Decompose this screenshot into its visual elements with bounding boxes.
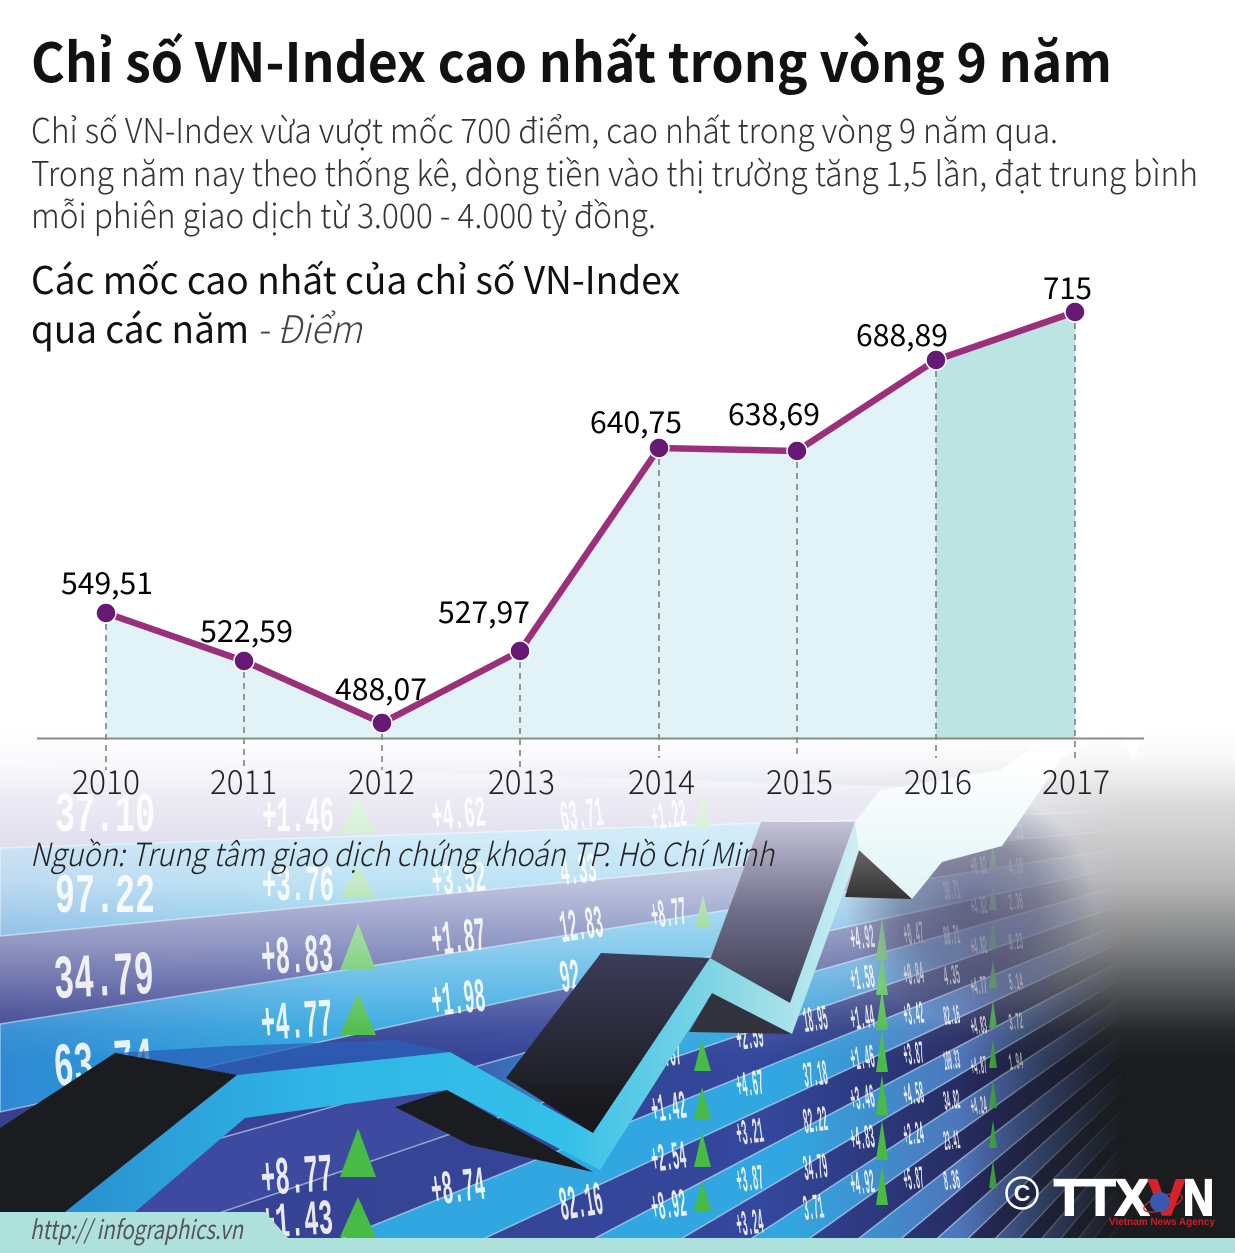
ticker numbers: +3.87 bbox=[734, 1159, 766, 1203]
value labels bbox=[61, 264, 1092, 709]
ticker numbers: 34.79 bbox=[52, 941, 156, 1017]
logo: TTXVN: V bbox=[1148, 1169, 1185, 1226]
ticker numbers: +4.92 bbox=[848, 1165, 877, 1206]
background photo: stock board with dark fade: 6.21 bbox=[1007, 819, 1025, 848]
logo: TTXVN: N bbox=[1183, 1169, 1214, 1226]
ticker numbers: +1.42 bbox=[649, 1085, 689, 1135]
logo: TTXVN: Vietnam News Agency bbox=[1109, 1216, 1215, 1228]
intro text block: mỗi phiên giao dịch từ 3.000 - 4.000 tỷ đồng. bbox=[31, 189, 656, 238]
ticker numbers: +1.58 bbox=[848, 960, 877, 1001]
ticker numbers: 82.16 bbox=[556, 1175, 607, 1235]
ticker numbers: 63.74 bbox=[51, 1027, 156, 1105]
footer strip with url: http:// infographics.vn bbox=[30, 1210, 244, 1247]
ticker numbers: +2.59 bbox=[734, 1017, 766, 1061]
year labels: 2017 bbox=[1042, 756, 1110, 804]
ticker numbers: +4.83 bbox=[969, 1011, 989, 1043]
background photo: stock board with dark fade bbox=[0, 730, 1235, 1253]
ticker numbers: +3.24 bbox=[734, 1203, 766, 1247]
ticker numbers: 34.82 bbox=[942, 1086, 962, 1119]
ticker numbers: 63.71 bbox=[558, 790, 606, 843]
ticker numbers: 3.71 bbox=[801, 1188, 826, 1231]
background photo: stock board with dark fade: 4.18 bbox=[1007, 854, 1025, 883]
copyright symbol bbox=[1006, 1178, 1038, 1208]
ticker numbers: +4.77 bbox=[969, 971, 989, 1003]
ticker numbers: +2.54 bbox=[649, 1135, 689, 1185]
ticker numbers: +1.87 bbox=[429, 911, 488, 970]
arrows: dark and cyan ribbons bbox=[0, 640, 1165, 1212]
line chart: VN-Index highs by year bbox=[37, 264, 1144, 804]
ticker numbers: 82.16 bbox=[942, 1001, 962, 1034]
value labels: 549,51 bbox=[61, 559, 153, 603]
ticker numbers: +3.52 bbox=[430, 854, 488, 909]
ticker numbers: 37.18 bbox=[801, 1054, 830, 1098]
ticker numbers: 92 bbox=[557, 952, 584, 1006]
ticker numbers: 30.71 bbox=[942, 876, 962, 909]
ticker numbers: +8.83 bbox=[260, 926, 335, 991]
ticker numbers: +4.92 bbox=[848, 920, 877, 961]
background photo: stock board with dark fade: 2.36 bbox=[1007, 889, 1025, 918]
ticker numbers: 4.33 bbox=[558, 846, 599, 898]
ticker numbers: 97.22 bbox=[55, 865, 155, 929]
ticker numbers: 4.35 bbox=[942, 961, 962, 994]
ticker numbers: +4.82 bbox=[969, 931, 989, 963]
background photo: stock board with dark fade: 1.94 bbox=[1007, 1049, 1025, 1078]
value labels: 527,97 bbox=[438, 588, 530, 632]
value labels: 522,59 bbox=[200, 607, 293, 651]
ticker numbers: 8.36 bbox=[942, 1166, 962, 1199]
ticker numbers: 18.95 bbox=[801, 999, 830, 1043]
ticker numbers: +8.77 bbox=[259, 1146, 335, 1212]
ticker numbers: +4.87 bbox=[969, 1051, 989, 1083]
value labels: 688,89 bbox=[856, 311, 948, 355]
chart heading: Các mốc cao nhất của chỉ số VN-Index bbox=[31, 250, 680, 305]
ticker numbers: +3.21 bbox=[734, 1112, 766, 1156]
background photo: stock board with dark fade: 5.14 bbox=[1007, 969, 1025, 998]
ticker numbers: +1.22 bbox=[649, 793, 689, 843]
ticker numbers: +3.46 bbox=[848, 1080, 877, 1121]
ticker numbers: +0.47 bbox=[901, 915, 926, 955]
logo: TTXVN bbox=[1054, 1169, 1215, 1228]
ticker numbers: +4.62 bbox=[430, 789, 488, 844]
value labels: 640,75 bbox=[590, 398, 682, 442]
ticker numbers: +5.87 bbox=[901, 1160, 926, 1200]
year labels: 2016 bbox=[904, 756, 972, 804]
intro text block bbox=[31, 104, 1198, 238]
background photo: stock board with dark fade: 3.72 bbox=[1007, 1009, 1025, 1038]
ticker numbers: +1.46 bbox=[262, 790, 334, 847]
footer strip with url bbox=[0, 1210, 1235, 1253]
ticker numbers: 82.22 bbox=[801, 1100, 830, 1144]
ticker numbers: +8.77 bbox=[649, 891, 689, 941]
ticker numbers: +4.87 bbox=[649, 1032, 685, 1081]
intro text block: Chỉ số VN-Index vừa vượt mốc 700 điểm, cao nhất trong vòng 9 năm qua. bbox=[31, 104, 1058, 153]
ticker numbers: +1.44 bbox=[848, 1000, 877, 1041]
ticker numbers: +0.84 bbox=[901, 955, 926, 995]
ticker numbers bbox=[51, 784, 1025, 1253]
ticker numbers: +4.83 bbox=[848, 1120, 877, 1161]
white fade over photo bbox=[0, 730, 1235, 1060]
ticker numbers: +4.24 bbox=[969, 1091, 989, 1123]
ticker numbers: +2.24 bbox=[901, 1115, 926, 1155]
chart heading bbox=[31, 250, 680, 354]
ticker numbers: 23.41 bbox=[942, 1126, 962, 1159]
ticker numbers: +8.92 bbox=[649, 1183, 689, 1233]
ticker numbers: +8.74 bbox=[428, 1160, 488, 1220]
source note: Nguồn: Trung tâm giao dịch chứng khoán TP. Hồ Chí Minh bbox=[30, 830, 775, 876]
ticker numbers: +1.98 bbox=[429, 972, 488, 1031]
ticker numbers: 12.83 bbox=[557, 898, 607, 956]
title: Chỉ số VN-Index cao nhất trong vòng 9 năm bbox=[31, 19, 1112, 98]
green triangles bbox=[340, 790, 997, 1237]
ticker numbers: +4.67 bbox=[734, 1064, 766, 1108]
ticker numbers: +4.82 bbox=[969, 891, 989, 923]
year labels: 2012 bbox=[348, 756, 415, 804]
chart heading: - Điểm bbox=[257, 299, 364, 354]
chart heading: qua các năm bbox=[31, 299, 249, 354]
darker right-hand board area bbox=[845, 790, 1095, 1020]
ticker numbers: +3.76 bbox=[262, 859, 334, 916]
ticker numbers: +1.43 bbox=[259, 1192, 335, 1253]
ticker numbers: +0.82 bbox=[969, 851, 989, 883]
year labels: 2015 bbox=[766, 756, 833, 804]
year labels: 2010 bbox=[72, 756, 140, 804]
ticker numbers: 100.33 bbox=[942, 1046, 962, 1079]
logo: TTXVN: TTX bbox=[1054, 1169, 1149, 1226]
year labels: 2013 bbox=[488, 756, 555, 804]
ticker numbers: 37.10 bbox=[55, 784, 155, 848]
value labels: 638,69 bbox=[728, 390, 820, 434]
ticker numbers: +3.42 bbox=[901, 995, 926, 1035]
year labels bbox=[72, 756, 1110, 804]
year labels: 2011 bbox=[210, 756, 277, 804]
ticker numbers: 80.71 bbox=[942, 921, 962, 954]
ticker numbers: +4.58 bbox=[901, 1075, 926, 1115]
year labels: 2014 bbox=[628, 756, 695, 804]
copyright symbol: C bbox=[1014, 1180, 1030, 1206]
background photo: stock board with dark fade: 8.23 bbox=[1007, 929, 1025, 958]
ticker numbers: 34.79 bbox=[801, 1147, 830, 1191]
value labels: 715 bbox=[1043, 264, 1092, 308]
ticker numbers: +3.87 bbox=[901, 1035, 926, 1075]
ticker numbers: +1.46 bbox=[848, 1040, 877, 1081]
value labels: 488,07 bbox=[335, 665, 427, 709]
ticker numbers: +4.77 bbox=[259, 991, 335, 1057]
